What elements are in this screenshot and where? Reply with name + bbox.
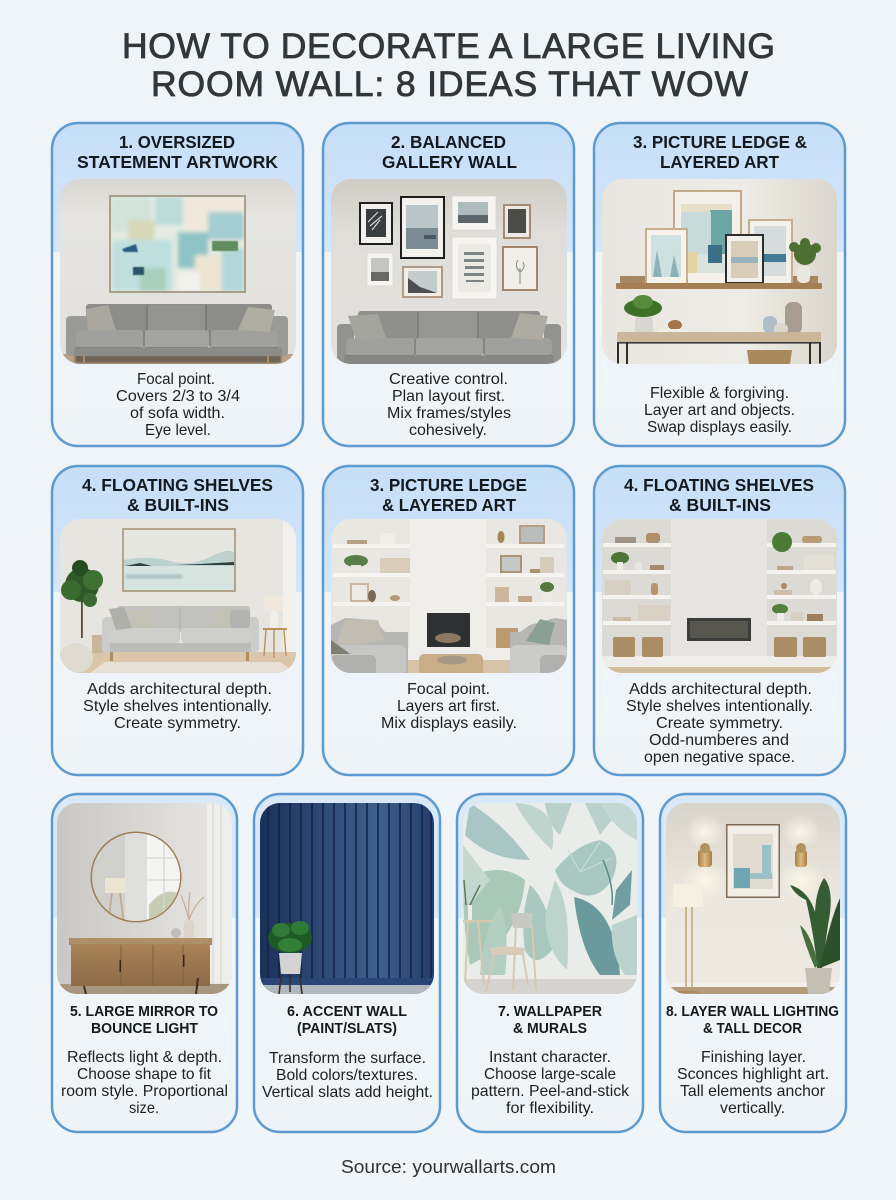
body text: card 2 (387, 371, 511, 439)
body text: card 5 (381, 681, 517, 732)
heading: card 6: & BUILT-INS (669, 495, 771, 515)
body text: card 1: Covers 2/3 to 3/4 (116, 388, 240, 405)
body text: card 2: Creative control. (389, 371, 508, 388)
heading: card 10: & TALL DECOR (703, 1021, 802, 1037)
heading: card 8 (287, 1004, 407, 1037)
body text: card 9: for flexibility. (506, 1100, 594, 1117)
image: gallery wall above sofa (331, 179, 567, 364)
source line: Source: yourwallarts.com (341, 1157, 556, 1177)
heading: card 3: 3. PICTURE LEDGE & (633, 132, 807, 152)
body text: card 6: Odd-numberes and (649, 732, 789, 749)
body text: card 6 (626, 681, 813, 766)
heading: card 4: 4. FLOATING SHELVES (82, 475, 273, 495)
panel: 7. wallpaper and murals (457, 794, 643, 1132)
body text: card 9: pattern. Peel-and-stick (471, 1083, 630, 1100)
body text: card 5: Layers art first. (397, 698, 500, 715)
body text: card 3 (644, 385, 795, 436)
body text: card 8: Transform the surface. (269, 1050, 426, 1067)
title: ROOM WALL: 8 IDEAS THAT WOW (151, 64, 748, 104)
heading: card 1 (77, 132, 278, 172)
panel: 4. floating shelves and built-ins, living room (52, 466, 303, 775)
heading: card 2: GALLERY WALL (382, 152, 517, 172)
body text: card 10: Sconces highlight art. (677, 1066, 829, 1083)
panel: 8. layer wall lighting and tall decor (660, 794, 846, 1132)
body text: card 9: Choose large-scale (484, 1066, 616, 1083)
image: sofa with oversized abstract artwork (60, 179, 296, 364)
body text: card 2: Mix frames/styles (387, 405, 511, 422)
body text: card 3: Flexible & forgiving. (650, 385, 789, 402)
panel: 1. oversized statement artwork (52, 123, 303, 446)
heading: card 6 (624, 475, 814, 515)
body text: card 3: Swap displays easily. (647, 419, 792, 436)
image: picture ledge with console table (602, 179, 837, 364)
body text: card 6: open negative space. (644, 749, 795, 766)
image: built-in shelves with linear fireplace (602, 519, 837, 673)
heading: card 5: & LAYERED ART (382, 495, 516, 515)
heading: card 6: 4. FLOATING SHELVES (624, 475, 814, 495)
panel: 3. picture ledge and layered art, fireplace room (323, 466, 574, 775)
body text: card 4: Adds architectural depth. (87, 681, 272, 698)
heading: card 9: & MURALS (513, 1021, 587, 1037)
heading: card 8: 6. ACCENT WALL (287, 1004, 407, 1020)
body text: card 4: Create symmetry. (114, 715, 241, 732)
body text: card 10: Finishing layer. (701, 1049, 806, 1066)
body text: card 8: Bold colors/textures. (276, 1067, 418, 1084)
heading: card 7: 5. LARGE MIRROR TO (70, 1004, 218, 1020)
body text: card 7: size. (129, 1100, 159, 1117)
body text: card 1: Eye level. (145, 422, 211, 439)
body text: card 1 (116, 371, 240, 439)
body text: card 8 (262, 1050, 433, 1101)
body text: card 10: vertically. (720, 1100, 785, 1117)
heading: card 7: BOUNCE LIGHT (91, 1021, 198, 1037)
body text: card 9: Instant character. (489, 1049, 611, 1066)
panel: 6. accent wall (254, 794, 440, 1132)
body text: card 2: cohesively. (409, 422, 487, 439)
image: botanical mural with chair (463, 803, 637, 994)
body text: card 7: Choose shape to fit (77, 1066, 212, 1083)
heading: card 5: 3. PICTURE LEDGE (370, 475, 527, 495)
heading: card 2 (382, 132, 517, 172)
title (122, 26, 775, 104)
panel: 4. floating shelves and built-ins, linear fireplace (594, 466, 845, 775)
heading: card 10 (666, 1004, 839, 1037)
heading: card 10: 8. LAYER WALL LIGHTING (666, 1004, 839, 1020)
body text: card 4 (83, 681, 272, 732)
body text: card 7 (61, 1049, 228, 1117)
heading: card 4: & BUILT-INS (127, 495, 229, 515)
body text: card 7: Reflects light & depth. (67, 1049, 222, 1066)
heading: card 5 (370, 475, 527, 515)
heading: card 1: STATEMENT ARTWORK (77, 152, 278, 172)
heading: card 1: 1. OVERSIZED (119, 132, 235, 152)
body text: card 10: Tall elements anchor (680, 1083, 826, 1100)
body text: card 10 (677, 1049, 829, 1117)
body text: card 6: Create symmetry. (656, 715, 783, 732)
heading: card 9 (498, 1004, 603, 1037)
image: living room with landscape art and plant (59, 519, 296, 673)
body text: card 9 (471, 1049, 630, 1117)
body text: card 2: Plan layout first. (392, 388, 505, 405)
heading: card 7 (70, 1004, 218, 1037)
body text: card 6: Style shelves intentionally. (626, 698, 813, 715)
image: round mirror above wood sideboard (57, 803, 232, 994)
heading: card 3: LAYERED ART (660, 152, 779, 172)
body text: card 5: Focal point. (407, 681, 490, 698)
panel: 5. large mirror to bounce light (52, 794, 237, 1132)
heading: card 9: 7. WALLPAPER (498, 1004, 603, 1020)
title: HOW TO DECORATE A LARGE LIVING (122, 26, 775, 66)
image: sconces, framed art, floor lamp and plant (666, 803, 840, 994)
body text: card 6: Adds architectural depth. (629, 681, 812, 698)
image: fireplace with built-in shelves and sofas (331, 519, 567, 685)
image: navy slat accent wall with plant (260, 803, 434, 994)
panel: 2. balanced gallery wall (323, 123, 574, 446)
panel: 3. picture ledge and layered art (594, 123, 845, 446)
body text: card 7: room style. Proportional (61, 1083, 228, 1100)
heading: card 4 (82, 475, 273, 515)
body text: card 5: Mix displays easily. (381, 715, 517, 732)
body text: card 1: of sofa width. (130, 405, 225, 422)
heading: card 8: (PAINT/SLATS) (297, 1021, 397, 1037)
body text: card 8: Vertical slats add height. (262, 1084, 433, 1101)
body text: card 4: Style shelves intentionally. (83, 698, 272, 715)
heading: card 3 (633, 132, 807, 172)
heading: card 2: 2. BALANCED (391, 132, 506, 152)
body text: card 1: Focal point. (137, 371, 215, 388)
body text: card 3: Layer art and objects. (644, 402, 795, 419)
